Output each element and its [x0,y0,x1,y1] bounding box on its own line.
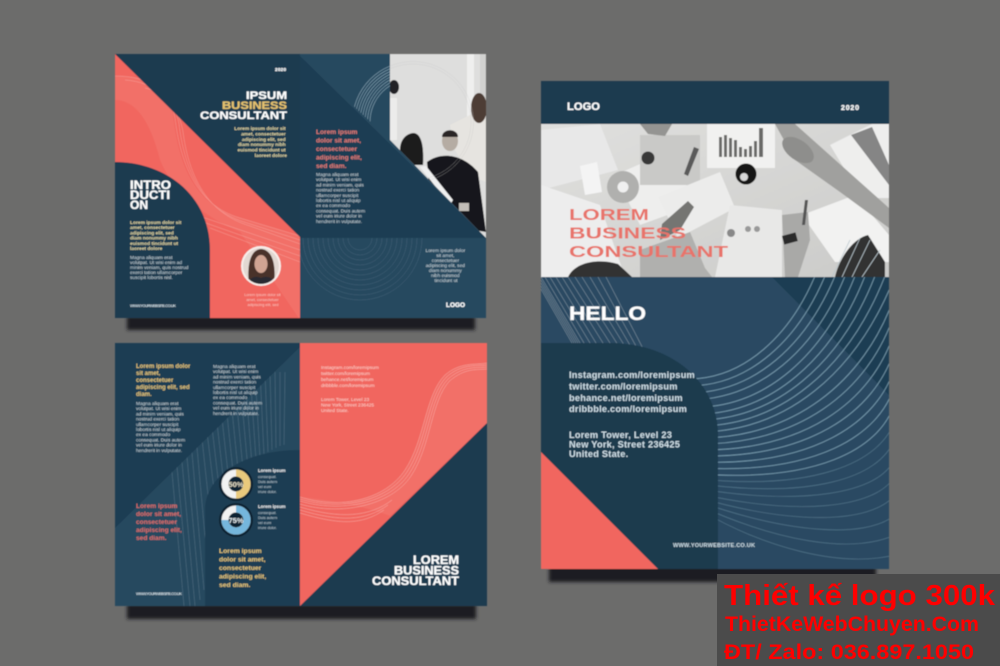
heading: introduction [130,180,171,212]
paragraph: laoreet dolore [255,153,287,159]
body text: consequat. Duis autem [316,208,365,214]
donut chart 75% [219,503,253,537]
body text column 2: hendrerit in vulputate. [213,411,259,417]
yellow subheading: sed diam. [219,582,250,589]
chart label 2: vel eum [258,521,271,525]
wave lines [115,76,300,262]
paragraph: euismod tincidunt ut [130,241,178,247]
body text: Magna aliquam erat [130,255,173,261]
paragraph: adipiscing elit, sed [130,230,174,236]
chart label 1: iriure dolor. [258,490,277,494]
watermark website: ThietKeWebChuyen.Com [725,613,979,636]
social links: dribbble.com/loremipsum [569,404,687,414]
paragraph: amet, consectetuer [130,225,175,231]
body text column 2: vel eum iriure dolor in [213,406,259,412]
dark triangle [115,343,300,528]
photo title [569,207,728,261]
centered text: nibh euismod [431,273,460,279]
centered text: adipiscing elit, sed [426,263,465,269]
paragraph: euismod tincidunt ut [238,148,286,154]
yellow subheading: sit amet, [136,371,161,377]
logo: LOGO [567,101,600,113]
paragraph: Lorem ipsum dolor sit [234,126,286,132]
yellow subheading: Lorem ipsum [219,548,262,555]
body text column 2: ad minim veniam, quis [213,374,261,380]
body text column 1: ex ea commodo [136,432,170,438]
dark triangle [300,423,487,606]
body text: ex ea commodo [316,203,350,209]
curved lines [690,276,895,475]
social links: dribbble.com/loremipsum [321,383,375,389]
body text column 2: ullamcorper suscipit [213,385,256,391]
centered text: consectetuer [432,258,459,264]
photo title: BUSINESS [569,226,686,242]
address: New York, Street 236425 [569,440,680,450]
body text column 1: vel eum iriure dolor in [136,443,182,449]
body text column 1: consequat. Duis autem [136,437,185,443]
body text: ullamcorper suscipit [316,193,359,199]
centered text: sit amet, [436,253,454,259]
pink subheading: sed diam. [316,163,347,170]
paragraph: diam nonummy nibh [130,236,178,242]
body text: volutpat. Ut wisi enim ad [130,260,182,266]
yellow subheading: dolor sit amet, [219,556,266,564]
photo title: LOREM [569,207,649,224]
year: 2020 [275,67,286,72]
panel: hello page [541,81,895,569]
chart label 1: consequat. [258,475,277,479]
heading: introduction: ON [130,200,148,212]
pink subheading: dolor sit amet, [316,138,361,144]
yellow subheading: adipiscing elit, sed [136,385,190,391]
donut chart 75%: 75% [228,516,244,525]
dark corner [772,277,889,395]
body text: suscipit lobortis nisl. [130,275,173,281]
hatch lines [170,372,285,606]
chart label 2: iriure dolor. [258,526,277,530]
social links: behance.net/loremipsum [321,377,374,383]
header band [541,81,889,124]
panel: back cover [300,343,487,606]
logo: LOGO [446,302,465,309]
drop shadows [127,316,876,619]
paragraph: adipiscing elit, sed [242,137,286,143]
body text: volutpat. Ut wisi enim [316,177,361,183]
social links: twitter.com/loremipsum [569,382,678,392]
chart label 2: consequat. [258,511,277,515]
heading: ipsum business consultant: CONSULTANT [200,110,287,122]
wave lines [300,363,487,522]
centered text: diam nonummy [429,268,462,274]
heading: lorem business consultant: LOREM [413,555,459,567]
chart label 1: Duis autem [258,480,277,484]
lighter coral band [115,76,300,320]
pink subheading: adipiscing elit, [316,154,362,162]
chart label 2: Duis autem [258,516,277,520]
coral triangle [541,452,658,569]
body text column 2: nostrud exerci tation [213,380,257,386]
website: WWW.YOURWEBSITE.CO.UK [673,543,755,549]
caption: Lorem ipsum dolor sit [244,293,282,297]
body text: ad minim veniam, quis [316,182,364,188]
body text: Magna aliquam erat [316,172,359,178]
caption: amet, consectetuer [246,298,279,302]
address: United State. [569,449,628,459]
yellow subheading: consectetuer [219,565,262,572]
watermark title: Thiết kế logo 300k [724,580,996,612]
donut chart 50%: 50% [228,480,244,489]
pink subheading: adipiscing elit, [136,527,182,534]
centered text: tincidunt ut [434,278,458,284]
concentric arcs [354,66,391,122]
body text column 2: lobortis nisl ut aliquip [213,390,258,396]
faint arc on photo [429,106,474,180]
heading: lorem business consultant [372,555,459,588]
photo: team meeting [389,54,487,244]
pink subheading: dolor sit amet, [136,511,181,518]
brochure artwork [115,54,895,619]
body text column 1: volutpat. Ut wisi enim [136,406,181,412]
donut chart 50% [219,467,253,501]
heading: ipsum business consultant [200,90,287,122]
body text: nostrud exerci tation [316,188,360,194]
social links: behance.net/loremipsum [569,393,683,403]
photo: business desk [541,124,889,277]
heading: lorem business consultant: CONSULTANT [372,576,459,588]
dark arch panel [541,343,718,569]
pink subheading: Lorem ipsum [316,129,358,136]
body text column 2: ex ea commodo [213,395,247,401]
pink subheading: consectetuer [136,519,177,526]
body text column 1: Magna aliquam erat [136,401,179,407]
body text column 2: volutpat. Ut wisi enim [213,369,258,375]
body text: lobortis nisl ut aliquip [316,198,361,204]
social links: twitter.com/loremipsum [321,371,370,377]
website: WWW.YOURWEBSITE.CO.UK [130,303,176,308]
body text: vel eum iriure dolor in [316,214,362,220]
yellow subheading: consectetuer [136,378,174,384]
heading: ipsum business consultant: IPSUM [246,90,287,102]
portrait [241,246,281,286]
pink subheading: Lorem ipsum [136,503,178,510]
address: United State. [321,408,349,414]
watermark phone: ĐT/ Zalo: 036.897.1050 [724,641,974,664]
photo title: CONSULTANT [569,244,728,261]
heading: ipsum business consultant: BUSINESS [222,100,287,112]
centered text: Lorem ipsum dolor [425,248,466,254]
social links: Instagram.com/loremipsum [321,365,379,371]
coral diagonal shape [115,54,300,318]
website: WWW.YOURWEBSITE.CO.UK [136,591,182,596]
body text column 1: ad minim veniam, quis [136,411,184,417]
watermark box [717,574,1000,666]
lighter coral swoosh [300,363,487,516]
address: Lorem Tower, Level 23 [569,430,672,440]
yellow subheading: diam. [136,392,152,398]
panel: infographic page [115,343,300,606]
body text: exerci tation ullamcorper [130,270,183,276]
caption: adipiscing elit, sed [247,303,279,307]
heading: introduction: INTRO [130,180,171,192]
paragraph: laoreet dolore [130,246,163,252]
chart label 1: vel eum [258,485,271,489]
dark triangle panel [300,56,486,238]
panel: introduction page [115,54,300,320]
body text column 1: nostrud exerci tation [136,417,180,423]
body text: hendrerit in vulputate. [316,219,362,225]
chart label 1: Lorem ipsum [258,468,286,473]
curved lines lower [718,432,890,560]
body text column 2: Magna aliquam erat [213,364,256,370]
address: Lorem Tower, Level 23 [321,397,370,403]
body text column 2: consequat. Duis autem [213,400,262,406]
pink subheading: sed diam. [136,535,167,542]
fan lines [540,276,643,348]
body text column 1: lobortis nisl ut aliquip [136,427,181,433]
year: 2020 [841,105,859,112]
paragraph: diam nonummy nibh [238,142,286,148]
body text column 1: hendrerit in vulputate. [136,448,182,454]
heading: introduction: DUCTI [130,190,170,202]
paragraph: amet, consectetuer [241,131,286,137]
body text: minim veniam, quis nostrud [130,265,189,271]
social links: Instagram.com/loremipsum [569,370,695,380]
hello heading: HELLO [569,304,646,325]
paragraph: Lorem ipsum dolor sit [130,220,182,226]
yellow subheading: Lorem ipsum dolor [136,364,191,370]
chart label 1 [258,468,286,494]
panel: photo page [298,54,487,318]
address: New York, Street 236425 [321,402,374,408]
chart label 2: Lorem ipsum [258,504,286,509]
pink subheading: consectetuer [316,146,357,153]
heading: lorem business consultant: BUSINESS [394,566,459,578]
yellow subheading: adipiscing elit, [219,574,266,580]
dark arch [205,450,300,606]
body text column 1: ullamcorper suscipit [136,422,179,428]
chart label 2 [258,504,286,530]
faint lines [300,239,422,300]
